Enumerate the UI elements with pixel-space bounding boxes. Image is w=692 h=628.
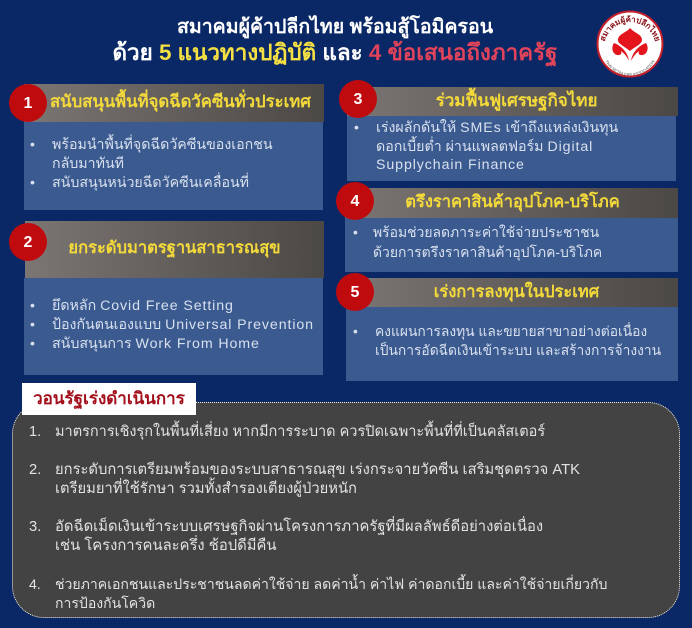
panel 5 header xyxy=(347,278,678,307)
panel 1 text: สนับสนุนหน่วยฉีดวัคซีนเคลื่อนที่ xyxy=(52,175,249,191)
panel 3 header: ร่วมฟื้นฟูเศรษฐกิจไทย xyxy=(436,91,597,110)
panel 1 text: กลับมาทันที xyxy=(52,156,124,172)
panel 3 text xyxy=(354,119,618,173)
text: 1. xyxy=(29,424,41,440)
panel 3 header xyxy=(347,87,678,116)
panel 3 text: เร่งผลักดันให้ SMEs เข้าถึงแหล่งเงินทุน xyxy=(376,120,618,136)
recommendation 2: เตรียมยาที่ใช้รักษา รวมทั้งสำรองเตียงผู้ป่วยหนัก xyxy=(55,481,357,497)
panel: 4: • xyxy=(353,224,358,240)
panel 2 text: สนับสนุนการ Work From Home xyxy=(52,336,260,352)
heading: government recommendations: วอนรัฐเร่งดำเนินการ xyxy=(33,389,185,408)
panel: government recommendations xyxy=(12,402,680,618)
panel 4 header: ตรึงราคาสินค้าอุปโภค-บริโภค xyxy=(405,193,620,211)
number badge 2: 2 xyxy=(24,234,32,251)
title xyxy=(112,15,558,67)
icon: association logo: THAI RETAILERS ASSOCIATION xyxy=(606,60,654,76)
panel 2 body xyxy=(24,278,323,375)
panel 5 text xyxy=(353,322,661,358)
panel: 3 xyxy=(339,80,678,181)
panel 5 text: คงแผนการลงทุน และขยายสาขาอย่างต่อเนื่อง xyxy=(375,324,647,339)
panel 2 text: ป้องกันตนเองแบบ Universal Prevention xyxy=(52,317,314,333)
number badge 3: 3 xyxy=(354,91,362,108)
panel 4 text: พร้อมช่วยลดภาระค่าใช้จ่ายประชาชน xyxy=(373,224,599,240)
number badge 1 xyxy=(9,84,47,122)
recommendation 4: ช่วยภาคเอกชนและประชาชนลดค่าใช้จ่าย ลดค่าน้ำ ค่าไฟ ค่าดอกเบี้ย และค่าใช้จ่ายเกี่ยวกับ xyxy=(55,576,607,592)
recommendation 3 xyxy=(29,516,543,554)
recommendation 2: ยกระดับการเตรียมพร้อมของระบบสาธารณสุข เร่งกระจายวัคซีน เสริมชุดตรวจ ATK xyxy=(55,462,580,478)
recommendation 4 xyxy=(29,574,607,611)
panel 1 header xyxy=(24,84,324,122)
panel: 5 xyxy=(336,273,678,381)
panel 4 header xyxy=(345,188,678,218)
panel: 4 xyxy=(336,182,678,272)
number badge 1: 1 xyxy=(24,95,32,112)
panel: 1 xyxy=(9,84,324,210)
panel 1 header: สนับสนุนพื้นที่จุดฉีดวัคซีนทั่วประเทศ xyxy=(50,92,311,111)
icon: association logo: สมาคมผู้ค้าปลีกไทย xyxy=(600,15,660,42)
recommendation 4: การป้องกันโควิด xyxy=(55,595,155,611)
icon: association logo xyxy=(596,10,664,78)
recommendation 1: มาตรการเชิงรุกในพื้นที่เสี่ยง หากมีการระบาด ควรปิดเฉพาะพื้นที่ที่เป็นคลัสเตอร์ xyxy=(55,424,545,440)
text: 2. xyxy=(29,462,41,478)
panel 2 text xyxy=(30,298,314,352)
text: 3. xyxy=(29,519,41,535)
number badge 5: 5 xyxy=(351,284,359,301)
number badge 4: 4 xyxy=(351,193,359,210)
panel: 5: • xyxy=(353,324,358,339)
panel 5 text: เป็นการอัดฉีดเงินเข้าระบบ และสร้างการจ้างงาน xyxy=(375,343,661,358)
panel: 2: • xyxy=(30,336,35,352)
number badge 2 xyxy=(9,223,47,261)
panel 3 body xyxy=(347,116,676,181)
recommendation 3: อัดฉีดเม็ดเงินเข้าระบบเศรษฐกิจผ่านโครงการภาครัฐที่มีผลลัพธ์ดีอย่างต่อเนื่อง xyxy=(55,519,543,535)
number badge 4 xyxy=(336,182,374,220)
title line 2: ด้วย 5 แนวทางปฏิบัติ และ 4 ข้อเสนอถึงภาครัฐ xyxy=(112,40,558,65)
panel: 1: • xyxy=(30,175,35,191)
number badge 5 xyxy=(336,273,374,311)
panel 1 text xyxy=(30,134,273,191)
panel 4 text: ด้วยการตรึงราคาสินค้าอุปโภค-บริโภค xyxy=(373,244,602,260)
panel 5 body xyxy=(346,307,678,381)
text: 4. xyxy=(29,576,41,592)
panel 1 body xyxy=(24,122,323,210)
panel: 2: • xyxy=(30,298,35,314)
panel 1 text: พร้อมนำพื้นที่จุดฉีดวัคซีนของเอกชน xyxy=(52,137,273,153)
heading: government recommendations xyxy=(22,383,196,415)
panel 3 text: ดอกเบี้ยต่ำ ผ่านแพลตฟอร์ม Digital xyxy=(376,138,593,154)
panel 2 header: ยกระดับมาตรฐานสาธารณสุข xyxy=(68,239,281,257)
title line 1: สมาคมผู้ค้าปลีกไทย พร้อมสู้โอมิครอน xyxy=(177,16,493,38)
panel 3 text: Supplychain Finance xyxy=(376,157,525,173)
panel 4 text xyxy=(353,224,602,261)
panel: 2: • xyxy=(30,317,35,333)
recommendation 3: เช่น โครงการคนละครึ่ง ช้อปดีมีคืน xyxy=(55,538,276,554)
panel: 2 xyxy=(9,221,324,375)
panel: 1: • xyxy=(30,137,35,153)
panel: 3: • xyxy=(354,120,359,136)
recommendation 2 xyxy=(29,461,580,497)
panel 4 body xyxy=(345,218,678,272)
number badge 3 xyxy=(339,80,377,118)
panel 2 header xyxy=(25,221,324,278)
panel 2 text: ยึดหลัก Covid Free Setting xyxy=(52,298,234,314)
panel 5 header: เร่งการลงทุนในประเทศ xyxy=(434,283,599,301)
